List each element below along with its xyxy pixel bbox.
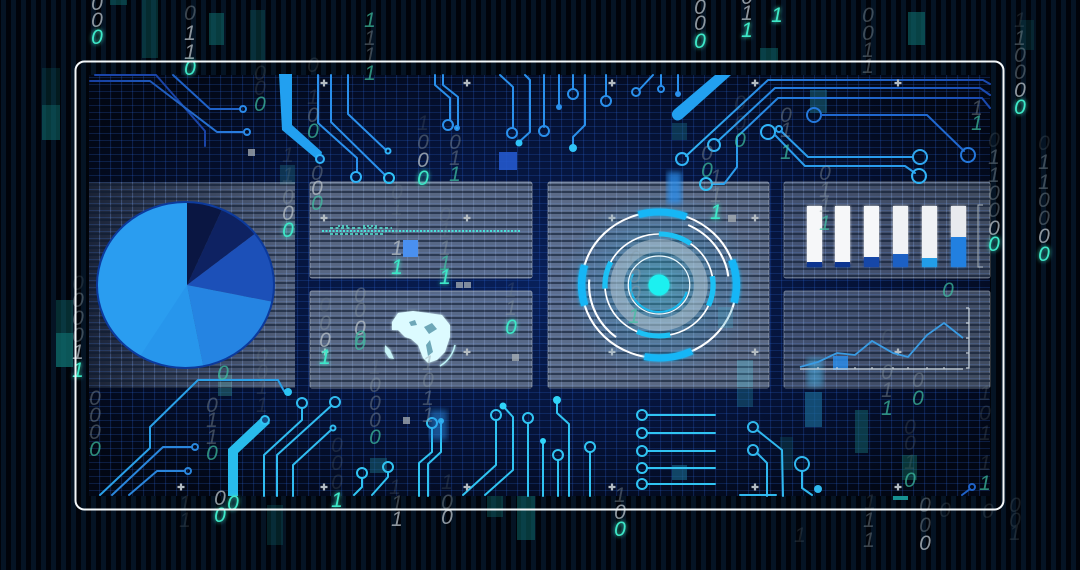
column: frame left: 1 [72,341,84,364]
column: above waveform card: 1 [417,112,429,135]
chart bracket [978,205,983,267]
column: waveform right: 1 [439,252,451,275]
columns: over line chart: 0 [912,369,924,392]
markers: small squares [248,149,736,424]
columns: bottom edge: 0 [441,491,453,514]
columns: bottom right: 0 [939,499,951,522]
translucent data blocks inside grid [218,90,917,500]
markers: plus signs [178,80,902,490]
column: upper traces: 0 [311,192,323,215]
columns: bottom right: 1 [794,524,806,547]
circuit traces: top left [90,75,250,146]
column: globe card left [319,294,331,369]
columns: bottom edge: 1 [391,508,403,531]
column: lower left: 0 [89,438,101,461]
columns: bottom edge: 1 [441,471,453,494]
column: above waveform card: 0 [417,131,429,154]
columns: upper right traces: 0 [701,142,713,165]
columns: bottom left edge: 11 [179,492,191,532]
column: upper left trace [254,62,266,116]
column: waveform left: 1 [391,256,403,279]
columns: bottom left edge: 0 [214,487,226,510]
column: frame left [72,272,84,382]
column: globe card left: 0 [319,312,331,335]
centre dot [648,274,670,296]
columns: bottom right: 1 [864,491,876,514]
column: far right one: 0 [1014,79,1026,102]
column: frame left: 1 [72,359,84,382]
column: globe card centre: 00 [354,284,366,322]
column: upper traces: 0 [311,177,323,200]
column: far right two: 0 [1038,132,1050,155]
column: top middle ones [741,0,783,42]
columns: bottom left edge: 0 [227,492,239,515]
columns: upper right traces: 1 [710,201,722,224]
columns: upper right traces: 00 [734,92,746,135]
columns: bottom edge: 1 [391,492,403,515]
columns: upper right traces: 0 [701,159,713,182]
column: globe card centre [354,284,366,355]
columns: over line chart: 0 [912,387,924,410]
bar 5 [922,206,937,267]
columns: bottom right: 001 [1009,494,1021,545]
column: over radar: 00 [629,265,641,305]
column: pie edge: 0 [282,202,294,225]
columns: over line chart: 0 [942,279,954,302]
inner ring [628,256,690,314]
column: pie edge [282,144,294,242]
bar 4 [893,206,908,267]
outer white arcs [589,219,729,351]
column: upper left: 0 [91,26,103,49]
outer cyan arcs [560,191,758,379]
pie chart [97,202,274,368]
column: frame right: 0 [988,233,1000,256]
column: globe card right: 1 [505,279,517,302]
column: above waveform card two: 01 [449,131,461,170]
column: over bar chart [819,97,983,235]
highlight glow [807,358,823,387]
column: lower left two [206,362,229,465]
slice seam [140,285,203,368]
column: over radar [628,247,641,328]
column: globe card centre: 00 [354,327,366,355]
column: lower centre: 000 [331,434,343,494]
columns: upper right traces: 01 [780,104,792,142]
columns: bottom right: 11 [863,509,875,552]
columns: bottom right [794,491,1021,555]
column: frame right: 0 [988,129,1000,152]
column: globe card right: 0 [505,316,517,339]
bar 1 [807,206,822,267]
column: lower left two: 0 [206,442,218,465]
columns: bottom edge: 0 [441,506,453,529]
column: lower centre: 1 [331,489,343,512]
column: upper left trace: 00 [254,62,266,100]
column: top right: 0011 [862,4,874,78]
column: bottom middle: 0 [614,518,626,541]
inner cyan arc [630,258,688,312]
column: below globe card: 1 [369,356,381,379]
column: pie edge: 0 [282,186,294,209]
column: upper traces: 0 [307,104,319,127]
columns: over line chart: 1 [881,397,893,420]
slice: sky blue [97,202,203,368]
line chart [800,308,969,387]
column: globe card left: 0 [319,294,331,317]
column: above waveform card: 0 [417,149,429,172]
column: far right two: 0 [1038,225,1050,248]
column: lower left: 000 [89,387,101,444]
columns: bottom edge: 1 [389,476,401,499]
outer white ring [582,212,736,358]
column: upper traces: 01 [307,54,319,109]
column: over radar: 0 [629,247,641,270]
column: far right one: 1 [1014,9,1026,32]
middle cyan arcs [596,226,722,344]
column: far right one [1014,9,1026,119]
column: top left inner: 11 [184,22,196,64]
column: below globe card: 000 [369,374,381,432]
thick trace end pad [316,155,324,163]
column: above waveform card: 0 [417,167,429,190]
column: above waveform card two [449,131,461,186]
highlight block [833,356,848,370]
columns: over line chart [881,279,954,420]
column: over radar: 1 [628,305,640,328]
glowing data blocks over cards [403,152,753,440]
halo [563,189,755,381]
column: above waveform card two: 1 [449,163,461,186]
icon: connector list [637,410,715,489]
globe [385,311,455,366]
column: globe card centre: 0 [354,317,366,340]
column: far right one: 100 [1014,27,1026,84]
column: top left inner: 0 [184,2,196,25]
thick trace [279,74,322,162]
panel: waveform card [310,182,532,278]
circuit traces: bottom right [740,422,975,496]
panel: bar chart card [784,182,990,278]
column: far right two [1038,132,1050,266]
southern land fragment [385,345,394,359]
circuit traces: bottom left [100,380,340,496]
radar rings [560,189,758,381]
columns: upper right traces: 11 [710,166,722,207]
column: top centre: 1 [364,62,376,85]
bar 2 [835,206,850,267]
columns: lower right: 1011 [979,382,991,475]
middle ring [605,234,713,336]
column: globe card right [505,279,517,339]
column: top middle ones: 1 [741,19,753,42]
column: waveform left: 011 [391,181,403,239]
columns: bottom edge [389,471,453,531]
axes [800,308,969,369]
columns: bottom left edge: 0 [214,504,226,527]
column: waveform right [439,204,451,289]
columns: upper right traces: 0 [734,129,746,152]
column: globe card left: 1 [319,346,331,369]
columns: lower right: 0 [904,469,916,492]
hatched ring [617,246,701,324]
column: upper left [91,0,103,49]
dashboard grid background [89,75,990,496]
columns: bottom right: 00 [919,494,931,537]
circuit traces: top right [676,80,990,190]
column: top middle ones: 1 [771,4,783,27]
column: frame left: 0 [72,272,84,295]
column: frame right: 0 [988,217,1000,240]
bar chart [807,205,983,267]
bar 3 [864,206,879,267]
column: top middle: 0 [694,30,706,53]
continents [392,311,450,363]
pie outline [97,202,274,368]
column: bottom middle: 1 [614,484,626,507]
column: top middle [694,0,706,53]
column: below globe: 1011 [422,352,434,427]
column: waveform right: 01 [439,204,451,242]
columns: over line chart: 0 [881,326,893,349]
column: frame right: 1100 [988,146,1000,222]
column: over bar chart: 1 [819,212,831,235]
column: over bar chart: 1 [971,112,983,135]
waveform [322,226,520,234]
column: globe card left: 0 [319,329,331,352]
column: above waveform card [417,112,429,190]
column: top centre: 11 [364,27,376,67]
column: frame left: 000 [72,289,84,347]
slice: mid blue [187,285,272,366]
globe edge arc [440,345,455,366]
columns: lower right: 1 [979,472,991,495]
column: waveform right: 1 [439,266,451,289]
columns: lower right [904,382,991,495]
column: top centre: 1 [364,9,376,32]
column: frame right [988,129,1000,256]
columns: bottom left edge [179,487,239,532]
columns: upper right traces: 1 [780,141,792,164]
column: lower left faint: 0011 [256,344,268,417]
column: lower left two: 011 [206,394,218,449]
slice: dark navy [187,209,255,285]
panel: radar card [548,182,769,388]
column: far right two: 0 [1038,243,1050,266]
column: below globe card: 0 [369,426,381,449]
columns: bottom right: 0 [919,532,931,555]
circuit traces: top centre [279,74,731,183]
slice: royal blue [187,234,274,302]
panel: pie chart card [89,182,295,388]
column: upper traces: 0 [311,162,323,185]
column: top left inner: 0 [184,57,196,80]
column: over bar chart: 1 [971,97,983,120]
column: waveform left: 1 [391,237,403,260]
column: upper traces [307,54,323,215]
land details [409,320,437,356]
column: top left inner [184,2,196,80]
column: lower left two: 0 [217,362,229,385]
column: globe card right: 1 [505,297,517,320]
white frame [76,62,1004,510]
column: far right two: 1100 [1038,151,1050,230]
bar 6 [951,206,966,267]
column: far right one: 0 [1014,96,1026,119]
data line [800,323,963,367]
column: upper left trace: 0 [254,93,266,116]
slash trace [672,75,731,120]
column: pie edge: 11 [282,144,294,187]
panel: globe card [310,291,532,388]
thick bottom trace [228,416,270,496]
column: waveform left [391,181,403,279]
column: below globe card [369,356,381,449]
column: top centre [364,9,376,85]
columns: lower right: 001 [904,416,916,474]
column: pie edge: 0 [282,219,294,242]
slice: darkest [187,202,222,285]
columns: over line chart: 01 [881,361,893,402]
column: upper traces: 0 [307,120,319,143]
panel: line chart card [784,291,990,388]
columns: upper right traces [701,92,792,224]
column: bottom middle [614,484,626,541]
column: waveform right: 1 [439,237,451,260]
column: over bar chart: 011 [819,162,831,217]
columns: bottom right: 0 [982,500,994,523]
circuit traces: bottom centre [354,396,595,496]
column: bottom middle: 0 [614,501,626,524]
